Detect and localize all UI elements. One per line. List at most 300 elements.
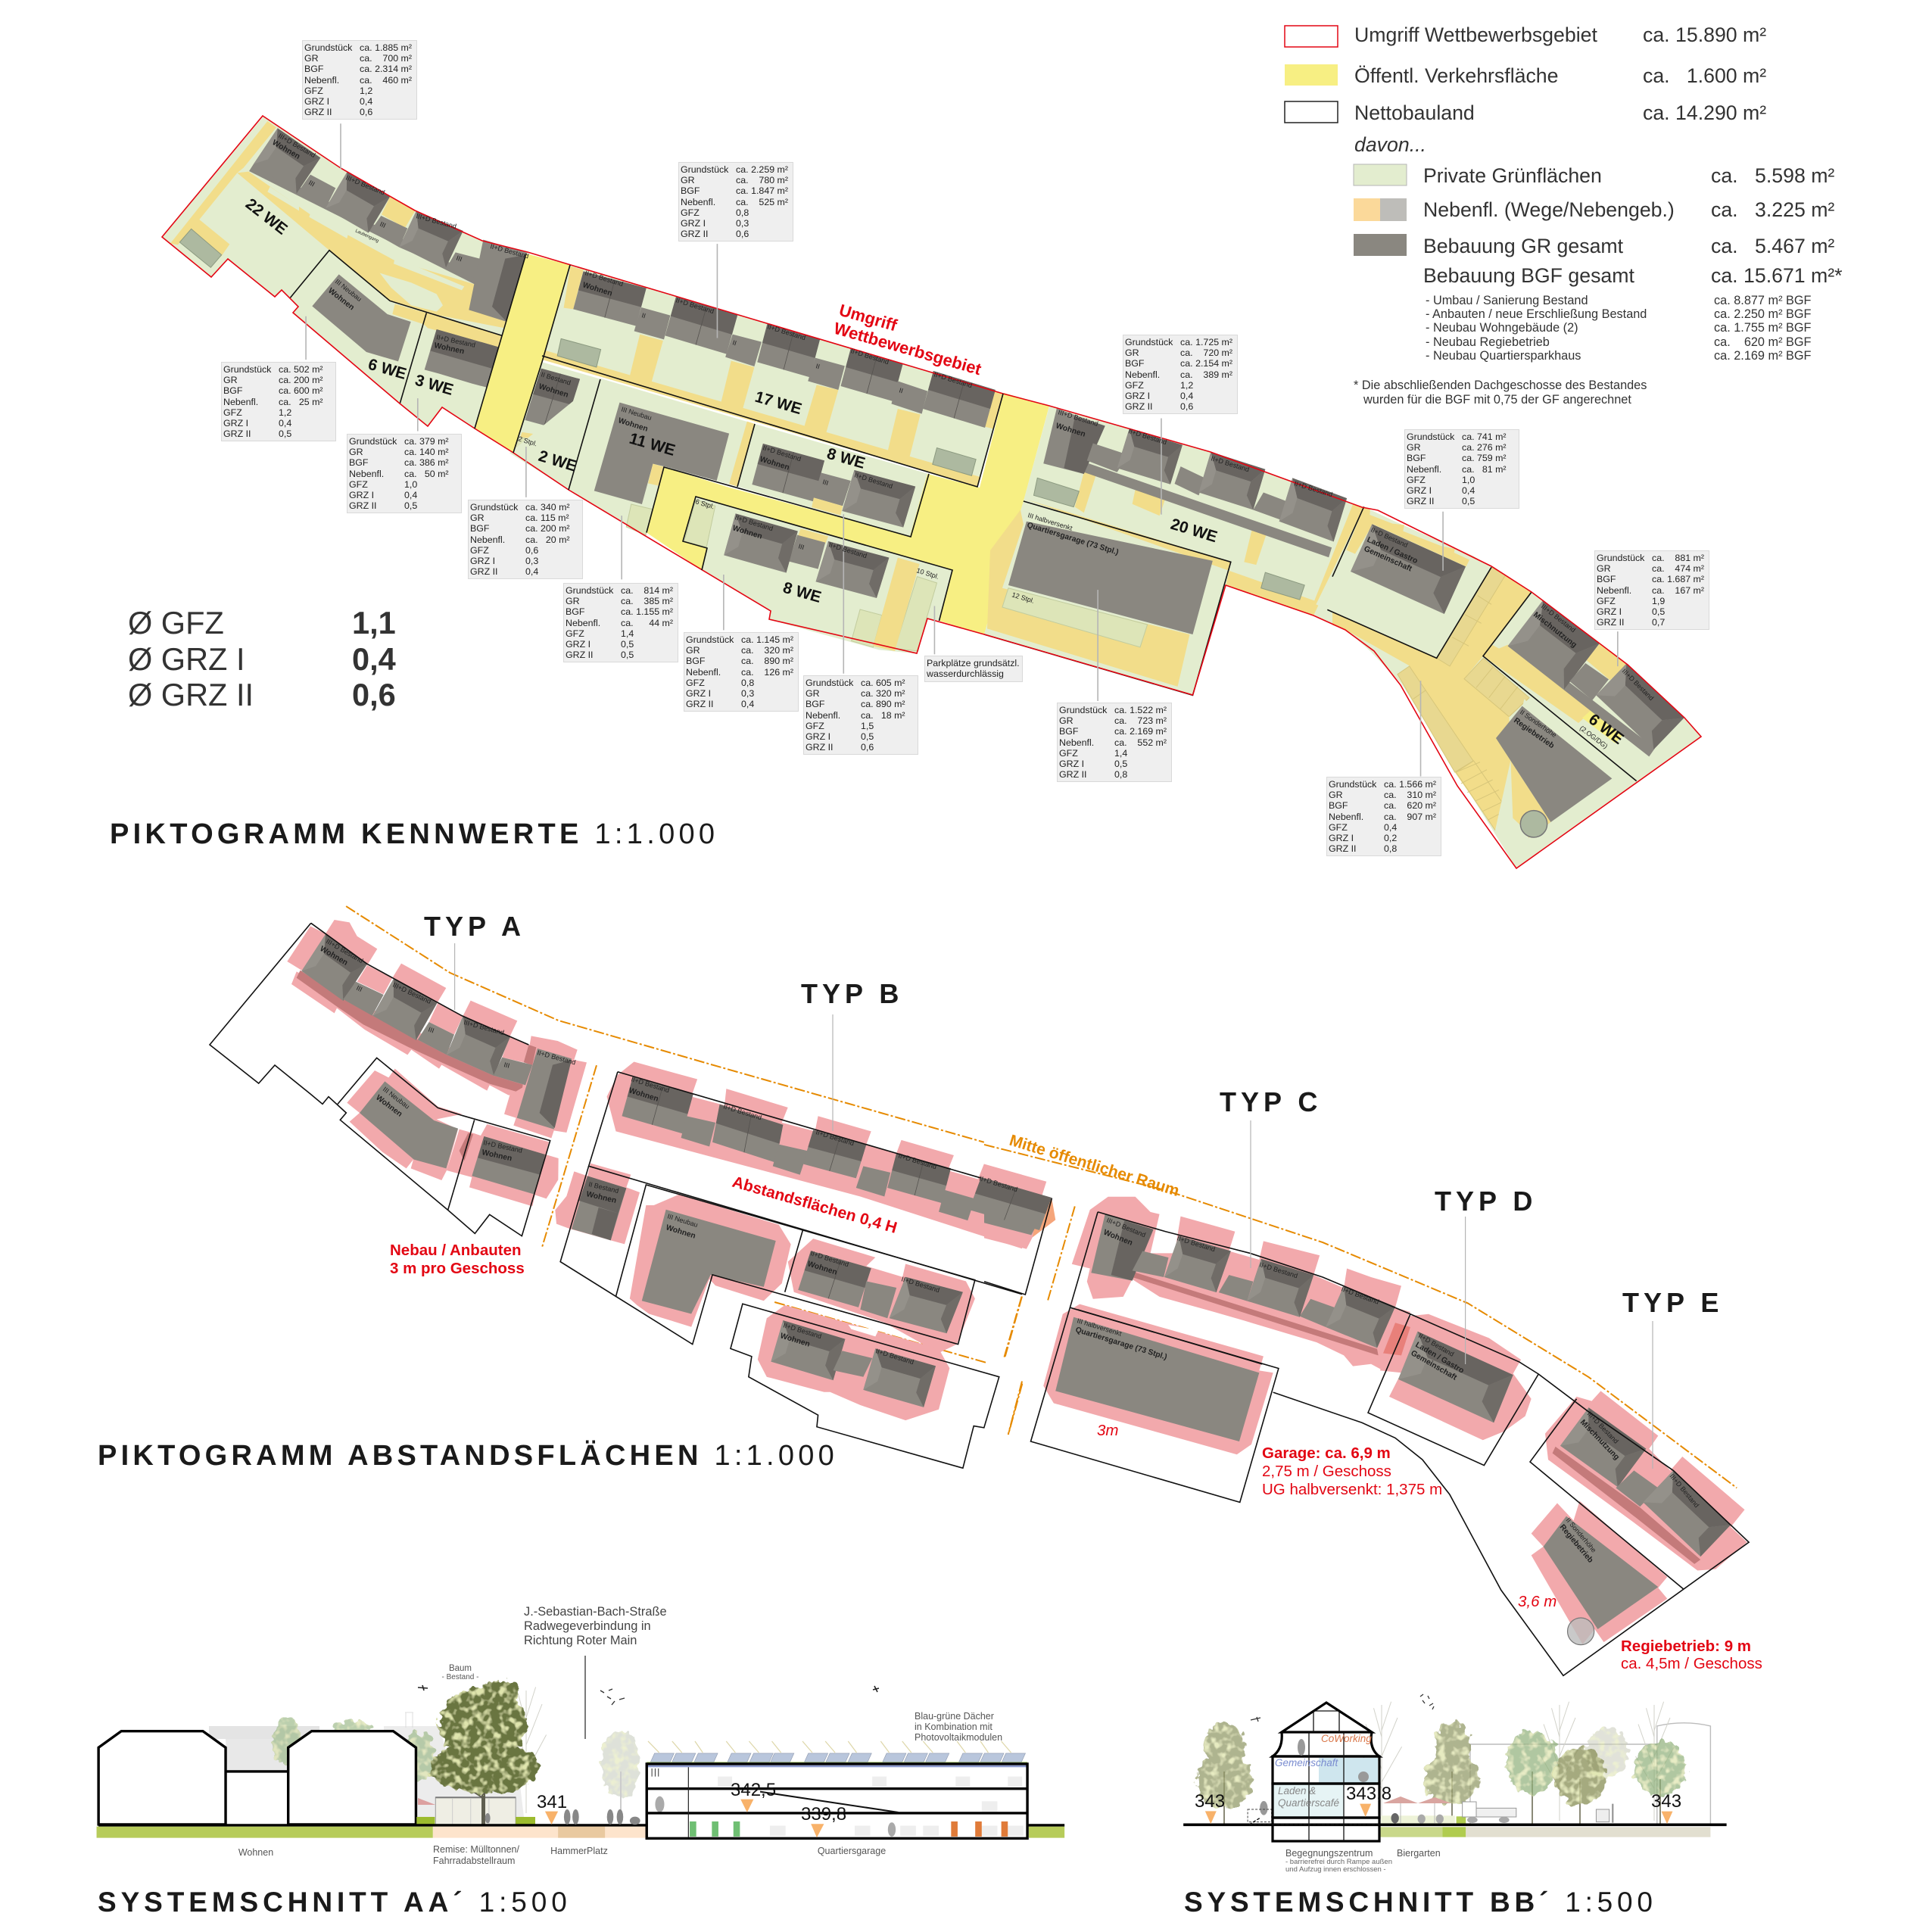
data box: Neubau 11 WE: GR — [566, 596, 580, 606]
section labels AA: - Bestand - — [442, 1673, 478, 1681]
data box: Typ D: GR — [1407, 442, 1421, 453]
data box: 8 WE south: 126 m² — [764, 667, 793, 678]
data box: Neubau 6 WE: ca. 200 m² — [279, 375, 323, 385]
trees BB — [1195, 1722, 1687, 1824]
data box: Neubau 11 WE: 1,4 — [621, 628, 634, 639]
data box: Typ C: 720 m² — [1203, 347, 1232, 358]
data box: Bestand 3 WE: Grundstück — [349, 436, 397, 447]
data box: Typ E: GRZ I — [1597, 606, 1622, 617]
data box: Typ B Hauptzeile: 0,3 — [736, 218, 749, 229]
data box: Typ A Hauptzeile: Nebenfl. — [304, 75, 339, 86]
legend text: - Anbauten / neue Erschließung Bestand — [1426, 307, 1647, 321]
block: Bestand 2 WE — [513, 362, 600, 490]
data box: Bestand 2 WE: 0,6 — [525, 545, 538, 556]
type headings: TYP D — [1435, 1186, 1537, 1217]
data box: Typ B Hauptzeile: 1.847 m² — [751, 185, 788, 196]
section labels AA: Richtung Roter Main — [524, 1634, 637, 1647]
building labels: Laden / Gastro — [1366, 536, 1419, 566]
type headings: TYP B — [801, 978, 903, 1009]
data box: Quartiersgarage: BGF — [1059, 726, 1078, 737]
building labels: Wohnen — [1102, 1229, 1133, 1248]
data box: 8 WE south: 890 m² — [764, 656, 793, 666]
data box: Typ C: GRZ I — [1125, 391, 1150, 401]
building labels: Regiebetrieb — [1512, 716, 1556, 750]
building labels: II+D Bestand — [815, 1128, 855, 1147]
red and orange annotations: Nebau / Anbauten — [390, 1242, 521, 1259]
data box: 8 WE south: ca. — [741, 667, 754, 678]
data box: Typ E: GR — [1597, 563, 1611, 574]
building labels: Wohnen — [617, 416, 649, 434]
data box: Neubau 11 WE: ca. — [621, 596, 634, 606]
section labels AA: J.-Sebastian-Bach-Straße — [524, 1605, 667, 1619]
data box: Typ C: 2.154 m² — [1195, 358, 1232, 369]
building labels: II+D Bestand — [853, 471, 893, 490]
data box: Typ E: ca. — [1652, 553, 1665, 563]
data box: Neubau 11 WE: BGF — [566, 606, 584, 617]
data box: Typ D: GRZ I — [1407, 485, 1432, 496]
building labels: III+D Bestand — [415, 212, 457, 230]
building labels: Wohnen — [433, 341, 465, 356]
data box: Neubau 6 WE: Nebenfl. — [223, 397, 258, 407]
data box: 8 WE south: GRZ I — [686, 688, 711, 699]
WE labels: 8 WE — [781, 579, 823, 606]
averages: GFZ GRZ — [128, 605, 396, 712]
data box: Bestand 3 WE: 0,5 — [404, 500, 417, 511]
data box: Neubau 6 WE: Grundstück — [223, 364, 271, 375]
data box: Quartiersgarage: 2.169 m² — [1130, 726, 1167, 737]
data box: 8 WE north: ca. 890 m² — [861, 699, 905, 709]
data box: 8 WE north: Nebenfl. — [806, 710, 840, 721]
building labels: II+D Bestand — [849, 347, 890, 366]
data box: Neubau 6 WE: 0,4 — [279, 418, 291, 428]
section labels AA: in Kombination mit — [915, 1722, 992, 1732]
data box: 8 WE south: Nebenfl. — [686, 667, 721, 678]
building labels: Wohnen — [759, 455, 790, 472]
building labels: II — [731, 338, 737, 347]
legend text: ca. — [1711, 235, 1738, 257]
data box: Typ C: 1.725 m² — [1195, 337, 1232, 347]
block: Typ B west — [509, 265, 1004, 653]
data box: Quartiersgarage: ca. — [1114, 705, 1127, 715]
building labels: II+D Bestand — [1370, 526, 1409, 549]
data box: Typ E: ca. — [1652, 585, 1665, 596]
data box: Regiebetrieb: GRZ II — [1329, 843, 1356, 854]
building labels: III — [427, 1025, 435, 1034]
building labels: II Bestand — [540, 370, 572, 387]
block: Typ D, E and Regiebetrieb — [1316, 506, 1701, 868]
legend text: ca. 15.890 m² — [1643, 23, 1766, 46]
data box: Regiebetrieb: 0,8 — [1384, 843, 1397, 854]
data box: Typ C — [1123, 335, 1238, 414]
distance areas east — [984, 1164, 1749, 1675]
averages: GFZ GRZ: Ø GFZ — [128, 605, 224, 640]
legend text: Private Grünflächen — [1423, 164, 1602, 187]
building labels: Wohnen — [326, 287, 356, 312]
data box: Bestand 2 WE: ca. 340 m² — [525, 502, 570, 513]
data box: 8 WE north: ca. 605 m² — [861, 678, 905, 688]
building labels: Wohnen — [806, 1260, 838, 1277]
data box: Neubau 11 WE: ca. — [621, 606, 634, 617]
data box: 8 WE north: GR — [806, 688, 820, 699]
building labels: 6 Stpl. — [694, 497, 715, 510]
legend text: ca. 14.290 m² — [1643, 101, 1766, 124]
data box: Typ C: 0,4 — [1180, 391, 1193, 401]
section labels AA: Remise: Mülltonnen/ — [433, 1844, 519, 1855]
legend text: ca. 620 m² BGF — [1714, 335, 1812, 349]
building labels: III+D Bestand — [463, 1018, 505, 1036]
data box: Typ E: Nebenfl. — [1597, 585, 1631, 596]
data box: Regiebetrieb — [1326, 777, 1441, 856]
data box: Bestand 3 WE: 1,0 — [404, 479, 417, 490]
building labels: III+D Bestand — [1105, 1217, 1147, 1239]
data box: Neubau 6 WE: BGF — [223, 385, 242, 396]
data box: Bestand 2 WE: GRZ I — [470, 556, 495, 566]
type leader lines — [455, 943, 1653, 1469]
building labels: III — [379, 220, 387, 229]
red and orange annotations: UG halbversenkt: 1,375 m — [1262, 1481, 1442, 1498]
data box: Bestand 3 WE: Nebenfl. — [349, 469, 384, 479]
data box: Typ D: GRZ II — [1407, 496, 1434, 506]
data box: 8 WE south: ca. — [741, 634, 754, 645]
data box: Bestand 3 WE: GRZ I — [349, 490, 374, 500]
data box: Regiebetrieb: 620 m² — [1407, 800, 1436, 811]
building labels: III+D Bestand — [1586, 1410, 1620, 1445]
red and orange annotations — [390, 1132, 1762, 1672]
data box: Bestand 2 WE: ca. 200 m² — [525, 523, 570, 534]
data box: Typ B Hauptzeile: 2.259 m² — [751, 164, 788, 175]
building labels: Gemeinschaft — [1410, 1349, 1458, 1382]
red boundary: Umgriff Wettbewerbsgebiet — [162, 116, 1701, 868]
data box: Typ B Hauptzeile: ca. — [736, 185, 749, 196]
data box: Quartiersgarage: Nebenfl. — [1059, 737, 1094, 748]
data box: Typ E: 1.687 m² — [1667, 574, 1704, 584]
data box: 8 WE north: ca. 18 m² — [861, 710, 905, 721]
data box: Typ A Hauptzeile: ca. — [360, 75, 372, 86]
title: Piktogramm Abstandsflächen: PIKTOGRAMM ABSTANDSFLÄCHEN 1:1.000 — [98, 1439, 838, 1472]
legend swatch: Nebenflächen — [1354, 198, 1407, 221]
data box: Neubau 6 WE: 0,5 — [279, 428, 291, 439]
legend text: ca. 1.755 m² BGF — [1714, 321, 1812, 335]
data box: Typ C: GRZ II — [1125, 401, 1152, 412]
data box: 8 WE south: GRZ II — [686, 699, 713, 709]
data box: Typ C: ca. — [1180, 358, 1193, 369]
data box: Typ C: GR — [1125, 347, 1139, 358]
type headings: TYP C — [1220, 1086, 1322, 1117]
legend — [1285, 23, 1843, 407]
data box: 8 WE north: BGF — [806, 699, 824, 709]
building labels: II+D Bestand — [1417, 1332, 1455, 1358]
averages: GFZ GRZ: Ø GRZ I — [128, 641, 245, 677]
data box: Quartiersgarage: GRZ I — [1059, 759, 1084, 769]
data box: Quartiersgarage: 552 m² — [1137, 737, 1167, 748]
building labels: III+D Bestand — [1057, 408, 1099, 428]
data box: Typ E: 0,7 — [1652, 617, 1665, 628]
data box: Typ D: ca. 759 m² — [1462, 453, 1507, 463]
data box: Regiebetrieb: 0,4 — [1384, 822, 1397, 833]
building labels: III Neubau — [620, 405, 653, 422]
legend text — [1354, 23, 1843, 407]
data box: Typ D: ca. 276 m² — [1462, 442, 1507, 453]
building labels: Wohnen — [538, 382, 569, 400]
data box: Typ A Hauptzeile: GR — [304, 53, 319, 64]
data box: Regiebetrieb: Nebenfl. — [1329, 812, 1363, 822]
data box: Typ A Hauptzeile: 1.885 m² — [375, 42, 412, 53]
building labels: Wohnen — [1055, 422, 1086, 439]
building labels: 10 Stpl. — [915, 566, 940, 581]
data box: 8 WE south: GR — [686, 645, 700, 656]
legend text: - Neubau Regiebetrieb — [1426, 335, 1550, 349]
type headings: TYP A — [424, 911, 525, 942]
building labels: Mischnutzung — [1532, 611, 1578, 650]
legend text: - Umbau / Sanierung Bestand — [1426, 294, 1588, 307]
legend text: - Neubau Quartiersparkhaus — [1426, 349, 1581, 363]
legend text: Nebenfl. (Wege/Nebengeb.) — [1423, 198, 1675, 221]
data box: Quartiersgarage: 1.522 m² — [1130, 705, 1167, 715]
ghost building, silo and bare trees — [1363, 1702, 1710, 1824]
building labels: II+D Bestand — [675, 296, 715, 315]
title: Systemschnitt BB: SYSTEMSCHNITT BB´ 1:500 — [1184, 1887, 1657, 1918]
data box: Typ B Hauptzeile: ca. — [736, 175, 749, 185]
section labels AA: Fahrradabstellraum — [433, 1856, 515, 1866]
level markers BB: 343 — [1195, 1791, 1225, 1812]
WE labels: 8 WE — [825, 445, 867, 472]
data box: Typ E: ca. — [1652, 563, 1665, 574]
data box: Typ A Hauptzeile: ca. — [360, 64, 372, 74]
distance areas west: Typ B — [560, 1062, 1022, 1468]
data box: Regiebetrieb: 0,2 — [1384, 833, 1397, 843]
data box: Quartiersgarage: 723 m² — [1137, 715, 1167, 726]
building labels: II — [898, 386, 904, 394]
last gable of row B — [969, 1177, 1052, 1230]
data box: 8 WE south: ca. — [741, 656, 754, 666]
data box: Bestand 3 WE: 0,4 — [404, 490, 417, 500]
data box: Typ E: 1,9 — [1652, 596, 1665, 606]
building labels: II+D Bestand — [489, 242, 530, 260]
legend text: Öffentl. Verkehrsfläche — [1354, 64, 1558, 87]
data box: Typ E: 881 m² — [1675, 553, 1704, 563]
data box: Typ D: Nebenfl. — [1407, 464, 1441, 475]
averages: GFZ GRZ: 0,4 — [352, 641, 396, 677]
data box: Bestand 2 WE: 0,4 — [525, 566, 538, 577]
data box: Regiebetrieb: ca. — [1384, 790, 1397, 800]
level markers BB: 343 — [1651, 1791, 1681, 1812]
WE labels: 6 WE — [366, 356, 408, 383]
data box: Typ E: BGF — [1597, 574, 1616, 584]
legend text: 5.598 m² — [1755, 164, 1834, 187]
building labels: III halbversenkt — [1076, 1317, 1123, 1338]
data box: 8 WE south: 320 m² — [764, 645, 793, 656]
tree: Bestand — [430, 1681, 539, 1824]
building labels: II — [640, 311, 647, 319]
background trees and ghost buildings — [209, 1687, 640, 1824]
legend text: ca. 15.671 m²* — [1711, 264, 1843, 287]
data box: 8 WE south: BGF — [686, 656, 705, 666]
data box: Regiebetrieb: BGF — [1329, 800, 1348, 811]
data box: Typ E — [1594, 550, 1709, 630]
building labels: III — [355, 984, 363, 993]
data box: Bestand 2 WE: BGF — [470, 523, 489, 534]
data box: Typ B Hauptzeile: BGF — [681, 185, 700, 196]
data box: 8 WE north: GRZ I — [806, 731, 830, 742]
legend swatch: Bebauung — [1354, 234, 1407, 256]
building labels: II+D Bestand — [1258, 1260, 1298, 1279]
building labels: III+D Bestand — [391, 981, 432, 1005]
data box: Typ A Hauptzeile: 460 m² — [382, 75, 412, 86]
data box: Regiebetrieb: GRZ I — [1329, 833, 1354, 843]
data box: Quartiersgarage: ca. — [1114, 737, 1127, 748]
level markers BB — [1195, 1784, 1681, 1824]
data box: Typ C: ca. — [1180, 337, 1193, 347]
data box: 8 WE south: GFZ — [686, 678, 705, 688]
section: Systemschnitt BB — [1183, 1694, 1727, 1874]
note box: Parkplätze: wasserdurchlässig — [927, 668, 1004, 679]
data box: Bestand 3 WE: GRZ II — [349, 500, 376, 511]
section labels AA: Quartiersgarage — [818, 1846, 886, 1856]
building labels: Mischnutzung — [1578, 1418, 1621, 1462]
building labels: Quartiersgarage (73 Stpl.) — [1074, 1326, 1168, 1362]
section labels AA: HammerPlatz — [550, 1846, 608, 1856]
building labels: II+D Bestand — [436, 333, 476, 349]
data box: 8 WE north: Grundstück — [806, 678, 853, 688]
data box: Quartiersgarage: GFZ — [1059, 748, 1078, 759]
building labels: II+D Bestand — [766, 323, 806, 341]
building labels: III — [821, 478, 830, 487]
type headings: TYP E — [1622, 1287, 1723, 1318]
building labels: III+D Bestand — [1540, 603, 1577, 634]
room and section labels BB: Gemeinschaft — [1275, 1757, 1339, 1768]
WE labels: 22 WE — [242, 195, 291, 238]
building labels: II+D Bestand — [1210, 454, 1250, 473]
red and orange annotations: 3m — [1097, 1422, 1118, 1439]
room and section labels BB: Begegnungszentrum — [1285, 1848, 1373, 1859]
data box: Typ A Hauptzeile: BGF — [304, 64, 323, 74]
data box: Neubau 11 WE: GRZ I — [566, 639, 591, 650]
legend text: ca. — [1711, 164, 1738, 187]
block: Typ C east and Quartiersgarage — [984, 406, 1701, 868]
data box: Regiebetrieb: GR — [1329, 790, 1343, 800]
building labels: II Bestand — [588, 1180, 619, 1195]
data box: Neubau 11 WE: 0,5 — [621, 650, 634, 660]
data box: Bestand 2 WE: 0,3 — [525, 556, 538, 566]
data box: Quartiersgarage: 1,4 — [1114, 748, 1127, 759]
data box: Regiebetrieb: 907 m² — [1407, 812, 1436, 822]
building labels: Regiebetrieb — [1558, 1523, 1594, 1565]
data box: Bestand 3 WE: ca. 140 m² — [404, 447, 449, 457]
averages: GFZ GRZ: 0,6 — [352, 677, 396, 712]
building labels: III+D Bestand — [344, 174, 386, 196]
data box: Neubau 11 WE: 814 m² — [643, 585, 673, 596]
legend text: 3.225 m² — [1755, 198, 1834, 221]
building labels: Laden / Gastro — [1414, 1341, 1465, 1376]
distance areas west: Typ A — [210, 920, 640, 1244]
building labels: III+D Bestand — [1621, 667, 1655, 702]
data box: 8 WE south: 0,8 — [741, 678, 754, 688]
data box: Neubau 11 WE: GRZ II — [566, 650, 593, 660]
data box: Regiebetrieb: GFZ — [1329, 822, 1348, 833]
data box: Neubau 11 WE: Nebenfl. — [566, 618, 600, 628]
data box: Typ B Hauptzeile: 780 m² — [759, 175, 788, 185]
data box: Typ B Hauptzeile: Grundstück — [681, 164, 728, 175]
data box: Bestand 2 WE — [468, 500, 583, 579]
WE labels: 6 WE — [1585, 711, 1627, 748]
data box: 8 WE north: ca. 320 m² — [861, 688, 905, 699]
data box: Regiebetrieb: 1.566 m² — [1399, 779, 1436, 790]
data box: 8 WE south: 0,3 — [741, 688, 754, 699]
data box: Typ C: ca. — [1180, 347, 1193, 358]
data box: Typ A Hauptzeile: GFZ — [304, 86, 323, 96]
data box: Bestand 3 WE — [347, 434, 462, 513]
data box: Typ C: GFZ — [1125, 380, 1144, 391]
data box: Quartiersgarage: 0,8 — [1114, 769, 1127, 780]
WE labels: 17 WE — [753, 388, 804, 418]
ground surfaces — [97, 1817, 1064, 1838]
legend text: ca. 1.600 m² — [1643, 64, 1766, 87]
leader lines — [306, 123, 1618, 777]
WE labels: 3 WE — [413, 372, 455, 399]
level markers AA: 342,5 — [731, 1780, 776, 1800]
building labels: Quartiersgarage (73 Stpl.) — [1026, 521, 1120, 557]
building labels: III Neubau — [334, 278, 363, 303]
Begegnungszentrum section — [1249, 1703, 1379, 1841]
building labels: III — [455, 254, 463, 263]
data box: Typ C: 0,6 — [1180, 401, 1193, 412]
data box: Bestand 3 WE: ca. 379 m² — [404, 436, 449, 447]
legend swatch: Grünflächen — [1354, 164, 1407, 185]
site plan: Piktogramm Abstandsflächen — [210, 906, 1762, 1675]
building labels: II+D Bestand — [900, 1275, 940, 1294]
room and section labels BB: Laden & — [1278, 1785, 1316, 1796]
data box: Neubau 11 WE: GFZ — [566, 628, 584, 639]
building labels: II+D Bestand — [584, 269, 624, 288]
data box: Quartiersgarage: ca. — [1114, 726, 1127, 737]
data box: Typ D: GFZ — [1407, 475, 1426, 485]
data box: Neubau 6 WE: ca. 502 m² — [279, 364, 323, 375]
data box: Typ C: BGF — [1125, 358, 1144, 369]
garage section — [647, 1762, 1027, 1838]
room and section labels BB: und Aufzug innen erschlossen - — [1285, 1865, 1386, 1874]
birds BB — [1251, 1694, 1434, 1722]
data box: Typ A Hauptzeile: GRZ II — [304, 107, 332, 117]
building labels: II+D Bestand — [483, 1139, 523, 1155]
data box: Typ A Hauptzeile: 700 m² — [382, 53, 412, 64]
building labels: III halbversenkt — [1027, 511, 1074, 532]
WE labels: (2.OG/DG) — [1578, 724, 1609, 750]
data box: Quartiersgarage: GR — [1059, 715, 1074, 726]
building labels: Wohnen — [665, 1223, 696, 1241]
data box: Typ D: 1,0 — [1462, 475, 1475, 485]
legend text: ca. — [1711, 198, 1738, 221]
data box: Typ A Hauptzeile: 2.314 m² — [375, 64, 412, 74]
data box: Typ A Hauptzeile: 0,4 — [360, 96, 372, 107]
building labels — [318, 937, 1700, 1565]
WE labels: 20 WE — [1169, 516, 1220, 546]
building labels: III+D Bestand — [277, 132, 316, 159]
data box: Bestand 3 WE: GR — [349, 447, 363, 457]
building labels: Laubengang — [354, 229, 379, 244]
data box: Typ B Hauptzeile: 525 m² — [759, 197, 788, 207]
data box: 8 WE south: 0,4 — [741, 699, 754, 709]
legend text: * Die abschließenden Dachgeschosse des Bestandes — [1354, 379, 1647, 392]
data box: Bestand 3 WE: ca. 50 m² — [404, 469, 449, 479]
street marker line — [584, 1656, 586, 1739]
data box: Bestand 2 WE: GRZ II — [470, 566, 497, 577]
data box: Neubau 6 WE: GRZ II — [223, 428, 251, 439]
legend text: ca. 8.877 m² BGF — [1714, 294, 1812, 307]
data box: Typ A Hauptzeile: ca. — [360, 42, 372, 53]
orange dashed lines: public space centre — [346, 906, 1737, 1488]
level markers AA: 341 — [537, 1792, 567, 1812]
data box: Bestand 2 WE: ca. 115 m² — [525, 513, 569, 523]
